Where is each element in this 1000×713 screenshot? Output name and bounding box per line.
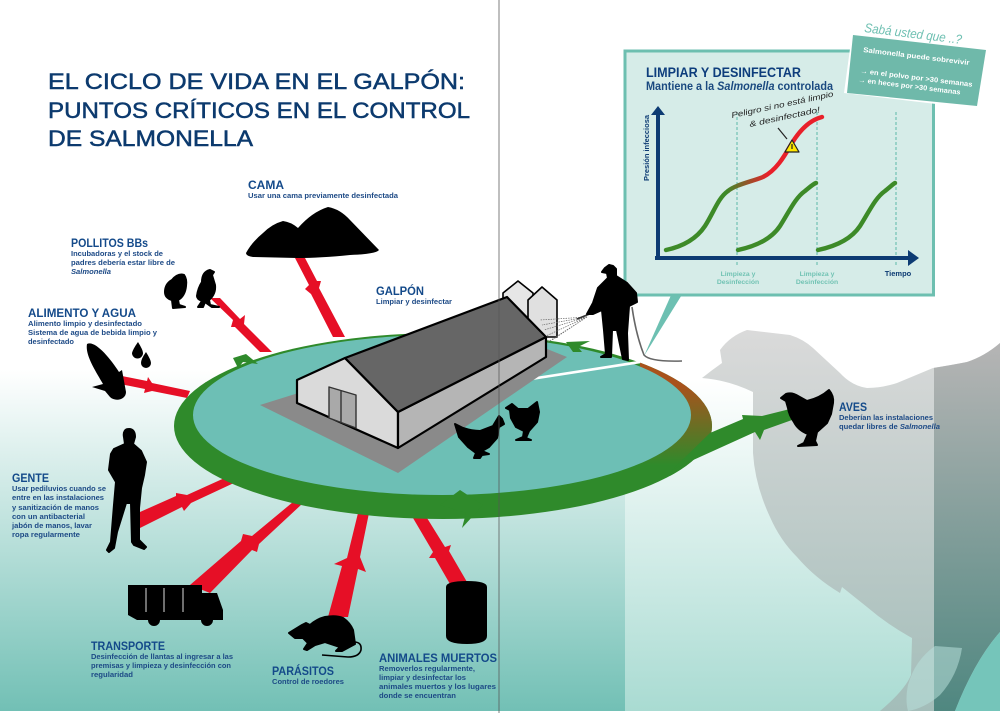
dashed time markers <box>737 112 896 265</box>
arrow: pollitos <box>210 298 272 352</box>
label: parásitos: PARÁSITOS <box>272 663 334 678</box>
chart heading <box>646 65 834 93</box>
title: EL CICLO DE VIDA EN EL GALPÓN: <box>48 69 465 94</box>
icon: chicks <box>165 270 219 308</box>
page fold line <box>498 0 500 713</box>
label: transporte: regularidad <box>91 670 134 679</box>
x axis labels: Desinfección <box>717 279 759 286</box>
title: PUNTOS CRÍTICOS EN EL CONTROL <box>48 98 470 123</box>
panel: sabía usted que <box>844 20 987 109</box>
chart heading: LIMPIAR Y DESINFECTAR <box>646 65 801 80</box>
label: alimento y agua: Alimento limpio y desinfectado <box>28 319 143 328</box>
label: pollitos: Salmonella <box>71 267 111 276</box>
label: parásitos <box>272 663 344 686</box>
label: transporte: Desinfección de llantas al ingresar a las <box>91 652 233 661</box>
label: cama <box>248 178 399 200</box>
icons: hens on the floor <box>455 402 539 458</box>
icon: barrel <box>446 581 487 644</box>
axes <box>651 106 919 266</box>
label: aves: quedar libres de Salmonella <box>839 422 940 431</box>
label: gente: jabón de manos, lavar <box>11 521 92 530</box>
card text: → en heces por >30 semanas <box>858 77 961 97</box>
x axis labels: Tiempo <box>885 269 912 278</box>
farmer with hose <box>577 265 682 361</box>
growth curves <box>666 117 895 250</box>
green exit arrow to aves <box>672 409 792 470</box>
icon: truck <box>128 585 223 626</box>
icon: warning triangle <box>785 140 799 152</box>
arrow: alimento y agua <box>120 376 190 398</box>
cycle ring and teal ground <box>174 333 712 528</box>
chart heading: Mantiene a la Salmonella controlada <box>646 81 834 93</box>
bottom edge <box>0 711 1000 713</box>
card text: → en el polvo por >30 semanas <box>860 68 973 89</box>
label: alimento y agua: desinfectado <box>28 337 74 346</box>
label: gente: GENTE <box>12 471 49 485</box>
arrow: parásitos <box>328 513 369 617</box>
galpón: barn and silos <box>260 281 567 473</box>
card text: Salmonella puede sobrevivir <box>863 47 970 67</box>
x axis labels: Limpieza y <box>800 271 835 278</box>
icon: person <box>107 429 146 552</box>
warning note <box>731 89 835 139</box>
label: gente <box>11 471 106 539</box>
arrow: animales muertos <box>413 518 467 584</box>
ring arrowheads <box>233 341 590 528</box>
x axis labels: Limpieza y <box>721 271 756 278</box>
label: transporte: premisas y limpieza y desinfección con <box>91 661 231 670</box>
label: galpón: GALPÓN <box>376 283 424 298</box>
label: alimento y agua: Sistema de agua de bebida limpio y <box>28 328 158 337</box>
water spray <box>540 317 587 342</box>
white separator line <box>505 362 640 383</box>
warning note: Peligro si no está limpio <box>731 89 835 120</box>
icon: litter mound <box>246 207 379 258</box>
label: pollitos: padres debería estar libre de <box>71 258 175 267</box>
x axis labels: Desinfección <box>796 279 838 286</box>
x axis labels <box>717 269 912 286</box>
handwritten heading: Sabá usted que ..? <box>864 20 963 47</box>
label: aves: AVES <box>839 400 867 414</box>
card text <box>858 47 973 97</box>
label: galpón <box>376 283 452 306</box>
label: galpón: Limpiar y desinfectar <box>376 297 452 306</box>
ground shadow <box>260 330 567 473</box>
label: animales muertos: donde se encuentran <box>379 691 456 700</box>
large background hen silhouette <box>702 330 1000 711</box>
title <box>48 69 470 151</box>
barn gable wall <box>297 358 398 448</box>
label: parásitos: Control de roedores <box>272 677 344 686</box>
label: gente: entre en las instalaciones <box>12 493 104 502</box>
barn roof <box>345 297 546 412</box>
label: pollitos: Incubadoras y el stock de <box>71 249 163 258</box>
label: animales muertos <box>379 651 497 700</box>
icon: rat <box>289 616 361 657</box>
label: animales muertos: Removerlos regularmente, <box>379 664 475 673</box>
label: aves: Deberían las instalaciones <box>839 413 933 422</box>
label: animales muertos: limpiar y desinfectar los <box>379 673 466 682</box>
label: gente: con un antibacterial <box>12 512 85 521</box>
panel: limpiar y desinfectar chart <box>625 51 934 295</box>
arrow: cama <box>295 258 345 337</box>
label: animales muertos: animales muertos y los lugares <box>379 682 496 691</box>
label: gente: ropa regularmente <box>12 530 80 539</box>
icon: water drops <box>132 342 151 368</box>
arrow: gente <box>140 476 236 528</box>
label: gente: y sanitización de manos <box>12 503 99 512</box>
y axis label: Presión infecciosa <box>644 115 651 181</box>
callout tail <box>644 293 683 356</box>
red arrows: risk inputs <box>120 258 467 617</box>
label: transporte: TRANSPORTE <box>91 639 165 653</box>
warning note: & desinfectado! <box>749 105 822 129</box>
barn door <box>329 387 356 428</box>
label: alimento y agua: ALIMENTO Y AGUA <box>28 306 136 320</box>
label: pollitos <box>71 236 175 276</box>
barn side wall <box>398 337 546 448</box>
label: pollitos: POLLITOS BBs <box>71 236 148 250</box>
label: gente: Usar pediluvios cuando se <box>12 484 106 493</box>
icon: corn <box>87 343 126 400</box>
silos <box>503 281 533 330</box>
label: animales muertos: ANIMALES MUERTOS <box>379 651 497 665</box>
label: aves <box>839 400 940 431</box>
arrow: transporte <box>190 502 302 593</box>
icon: hen aves <box>781 390 833 446</box>
label: cama: Usar una cama previamente desinfectada <box>248 191 399 200</box>
title: DE SALMONELLA <box>48 126 253 151</box>
label: transporte <box>91 639 233 679</box>
label: alimento y agua <box>28 306 158 346</box>
label: cama: CAMA <box>248 178 284 192</box>
